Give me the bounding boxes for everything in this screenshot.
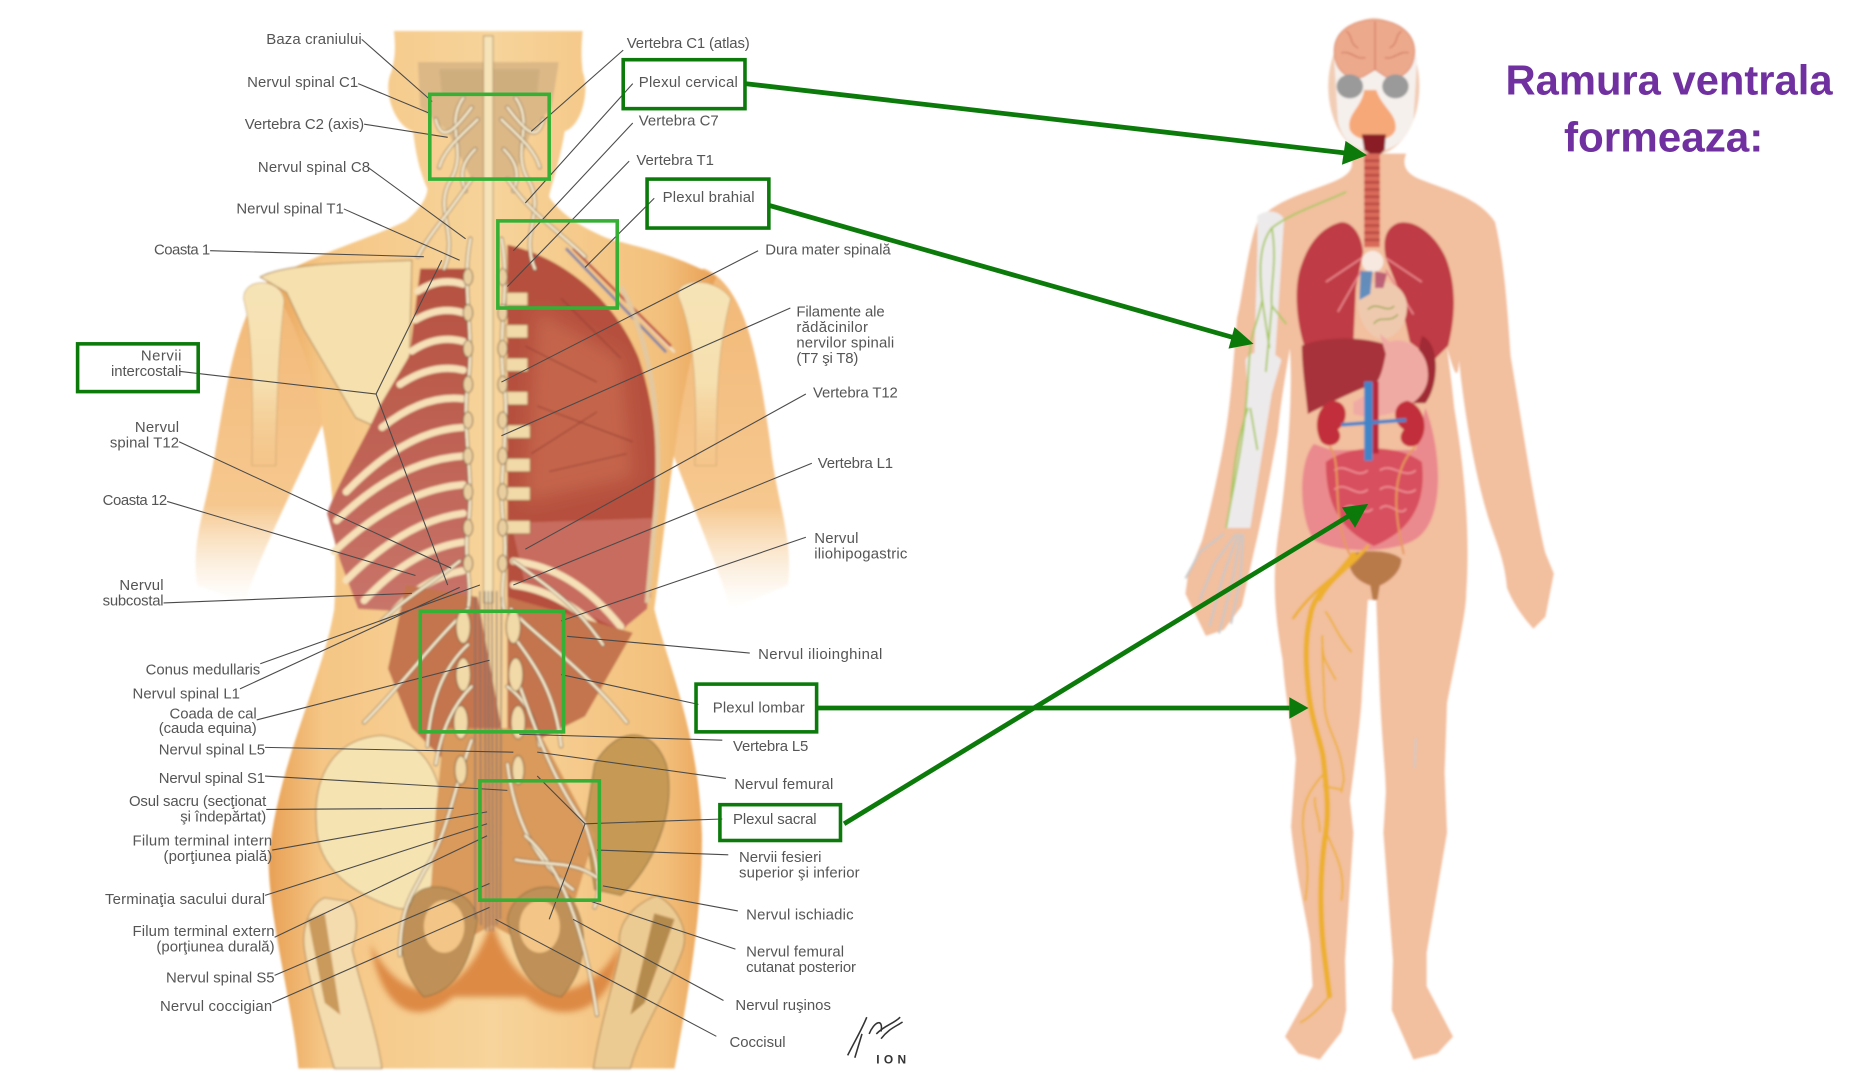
label: Dura mater spinală	[501, 241, 891, 382]
label: Nervul spinal S5: Nervul spinal S5	[166, 970, 275, 987]
right lung	[1384, 222, 1454, 360]
right femur	[593, 895, 684, 1069]
trachea	[1364, 154, 1380, 247]
label: Nervul ruşinos: Nervul ruşinos	[735, 997, 831, 1014]
label: Plexul lombar	[561, 675, 805, 717]
right ilium	[585, 735, 669, 895]
highlight: cervical region	[430, 94, 549, 179]
liver	[1302, 338, 1392, 414]
left ribs	[334, 282, 463, 611]
label: Vertebra L1: Vertebra L1	[818, 455, 893, 472]
label: Nervul iliohipogastric: iliohipogastric	[814, 546, 908, 563]
label: Coasta 1: Coasta 1	[154, 241, 210, 258]
title: formeaza:	[1564, 114, 1763, 161]
label: Nervul ruşinos	[573, 919, 831, 1014]
label: Nervul iliohipogastric	[561, 530, 908, 621]
label: Dura mater spinală: Dura mater spinală	[765, 241, 891, 258]
label: Nervul spinal L5	[159, 742, 513, 759]
sacrum area	[430, 728, 595, 943]
box: Plexul sacral	[720, 805, 840, 840]
box: Plexul cervical	[623, 60, 745, 109]
label: Osul sacru: Osul sacru (secţionat	[129, 793, 267, 810]
bronchi	[1362, 251, 1383, 272]
hand bones	[1185, 534, 1243, 634]
label: Vertebra C1	[531, 35, 750, 131]
lung vein texture	[525, 298, 633, 472]
back torso skin	[269, 31, 716, 1069]
label: Nervul spinal T1	[236, 201, 460, 260]
sciatic nerve main trunk	[1306, 554, 1353, 996]
skull	[1334, 37, 1417, 151]
highlight: brachial region	[498, 221, 617, 308]
label: Conus medullaris: Conus medullaris	[146, 662, 260, 679]
stomach	[1353, 334, 1428, 416]
brachial vessels	[566, 245, 675, 352]
arrow: Plexul cervical to neck	[745, 84, 1367, 165]
neck bones	[439, 69, 540, 93]
label: Vertebra C2	[245, 116, 448, 137]
label: Coada de cal: (cauda equina)	[159, 720, 257, 737]
title	[1505, 56, 1833, 161]
right arm	[651, 269, 789, 609]
box: Plexul brahial	[647, 179, 769, 228]
left femur	[304, 898, 382, 1069]
label: Nervul spinal L1: Nervul spinal L1	[133, 685, 240, 702]
label: Nervii intercostali	[111, 260, 448, 585]
label: Nervii intercostali: intercostali	[111, 363, 181, 380]
signature mark: ION	[876, 1053, 906, 1067]
highlight: sacral region	[480, 781, 599, 900]
label: Nervul coccigian	[160, 907, 489, 1015]
label: Filum terminal intern: (porţiunea pială)	[164, 848, 272, 865]
box: Nervii intercostali	[78, 344, 198, 392]
cauda equina	[475, 591, 501, 931]
panel: human body with organs and nerves	[1185, 18, 1554, 1059]
label: Nervul spinal S5	[166, 883, 489, 987]
label: Baza craniului	[266, 31, 432, 101]
right eye socket	[1382, 74, 1409, 98]
label: Vertebra T12: Vertebra T12	[813, 385, 898, 402]
label: Coada de cal	[159, 660, 489, 737]
label: Nervul femural cutanat posterior: Nervul femural	[746, 943, 844, 960]
renal vessels and aorta	[1341, 382, 1406, 461]
left scapula	[260, 260, 412, 429]
label: Nervul femural cutanat posterior: cutanat posterior	[746, 959, 856, 976]
label: Nervul spinal C8: Nervul spinal C8	[258, 159, 370, 176]
small intestine and colon	[1302, 408, 1438, 550]
knee highlight	[1415, 738, 1416, 768]
panel: posterior spinal anatomy illustration	[196, 31, 789, 1069]
label: Nervul spinal T12: Nervul	[135, 419, 179, 436]
label: Filamente ale rădăcinilor: (T7 şi T8)	[796, 350, 858, 367]
label: Coccisul: Coccisul	[729, 1034, 786, 1051]
right humerus	[678, 282, 731, 466]
spinal nerve plexus	[364, 98, 627, 1015]
label: Nervul spinal T1: Nervul spinal T1	[236, 201, 344, 218]
label: Nervul coccigian: Nervul coccigian	[160, 998, 272, 1015]
label: Filum terminal intern	[133, 812, 487, 865]
label: Filum terminal extern	[133, 836, 487, 956]
nasal cavity	[1349, 90, 1396, 140]
label: Plexul brahial: Plexul brahial	[663, 189, 755, 206]
box: Plexul lombar	[696, 684, 817, 732]
diaphragm muscle	[511, 518, 652, 630]
right flank band	[621, 287, 658, 603]
lung branching	[1326, 258, 1422, 314]
right lumbar muscle area	[507, 597, 633, 740]
label: Nervul femural	[537, 752, 833, 793]
label: Coasta 1	[154, 241, 424, 258]
leader lines and labels: right side	[495, 35, 908, 1051]
label: Vertebra C1: Vertebra C1 (atlas)	[627, 35, 750, 52]
ureters	[1329, 446, 1416, 554]
title: Ramura ventrala	[1505, 56, 1833, 103]
obturator foramen right	[519, 900, 560, 953]
lumbar muscle area	[388, 585, 501, 776]
signature mark	[848, 1017, 906, 1067]
label: Nervul spinal C1	[247, 74, 430, 113]
label: Plexul sacral: Plexul sacral	[733, 811, 817, 828]
label: Nervii fesieri	[597, 849, 860, 882]
label: Filum terminal extern: (porţiunea durală)	[156, 939, 275, 956]
label: Nervul spinal L5: Nervul spinal L5	[159, 742, 265, 759]
label: Vertebra C7	[513, 112, 719, 251]
label: Filum terminal extern: Filum terminal extern	[133, 923, 275, 940]
label: Coasta 12	[103, 492, 415, 575]
label: Nervul femural: Nervul femural	[734, 776, 833, 793]
label: Filamente ale rădăcinilor: nervilor spinali	[796, 334, 894, 351]
label: Nervul ischiadic: Nervul ischiadic	[746, 906, 854, 923]
neck and skull detail	[418, 62, 559, 179]
label: Nervul spinal C8	[258, 159, 466, 239]
lung mottling	[525, 310, 633, 501]
label: Vertebra L1	[513, 455, 893, 585]
label: Vertebra C2: Vertebra C2 (axis)	[245, 116, 364, 133]
label: Plexul sacral	[537, 776, 817, 919]
label: Nervul spinal S1: Nervul spinal S1	[159, 770, 265, 787]
label: Nervii intercostali: Nervii	[141, 348, 181, 365]
label: Osul sacru: şi îndepărtat)	[180, 808, 266, 825]
label: Nervul femural cutanat posterior	[591, 901, 856, 976]
label: Osul sacru	[129, 793, 454, 825]
label: Nervul spinal L1	[133, 587, 460, 702]
label: Filamente ale rădăcinilor: Filamente ale	[796, 303, 885, 320]
label: Nervul spinal S1	[159, 770, 507, 790]
label: Nervii fesieri: Nervii fesieri	[739, 849, 821, 866]
label: Nervul ilioinghinal	[567, 636, 882, 663]
leg nerve branches	[1293, 546, 1368, 1022]
label: Plexul brahial	[585, 189, 755, 267]
leader lines and labels: left side	[103, 31, 513, 1015]
label: Nervul spinal C1: Nervul spinal C1	[247, 74, 358, 91]
left ilium	[316, 735, 444, 909]
label: Terminaţia sacului dural	[105, 824, 487, 908]
label: Coasta 12: Coasta 12	[103, 492, 167, 509]
label: Conus medullaris	[146, 585, 480, 679]
left eye socket	[1337, 74, 1363, 98]
label: Nervul subcostal: Nervul	[119, 577, 164, 594]
spinal cord	[484, 36, 493, 603]
left lung	[1297, 222, 1363, 355]
bladder	[1349, 551, 1401, 600]
arrow: Plexul brahial to arm	[769, 205, 1254, 349]
label: Plexul cervical	[525, 74, 738, 203]
arrow: Plexul lombar to leg	[818, 697, 1308, 719]
right lung and muscle	[507, 245, 656, 633]
arrow: Plexul sacral to abdomen	[844, 504, 1368, 824]
label: Nervul ilioinghinal: Nervul ilioinghinal	[758, 646, 882, 663]
left rib cage	[327, 269, 468, 615]
right kidney	[1395, 401, 1425, 446]
label: Vertebra T12	[525, 385, 898, 549]
obturator foramen left	[424, 900, 464, 953]
thoracic ganglia beads	[463, 269, 507, 572]
label: Vertebra L5: Vertebra L5	[733, 738, 808, 755]
label: Baza craniului: Baza craniului	[266, 31, 362, 48]
label: Nervul spinal T12: spinal T12	[110, 435, 179, 452]
right lower rib bands	[513, 561, 621, 633]
buttocks shading	[370, 919, 621, 1012]
label: Nervul ischiadic	[603, 886, 854, 923]
label: Plexul cervical: Plexul cervical	[639, 74, 738, 91]
highlight: lumbar region	[420, 611, 564, 732]
larynx	[1362, 134, 1386, 158]
label: Filamente ale rădăcinilor: rădăcinilor	[796, 319, 868, 336]
pelvic floor bones	[401, 887, 478, 997]
left kidney	[1317, 401, 1346, 445]
left arm	[196, 277, 328, 603]
label: Coccisul	[495, 919, 786, 1051]
lumbar vertebrae	[454, 610, 525, 784]
left humerus	[244, 283, 284, 466]
arm bones	[1226, 211, 1284, 528]
right trochanter shading	[630, 913, 675, 1015]
heart	[1358, 271, 1407, 339]
right thoracic vertebral processes	[506, 293, 530, 534]
brain	[1334, 20, 1415, 78]
left trochanter shading	[308, 913, 340, 1015]
label: Nervul iliohipogastric: Nervul	[814, 530, 858, 547]
label: Nervul spinal T12	[110, 419, 451, 568]
label: Filamente ale rădăcinilor	[501, 303, 894, 436]
label: Vertebra L5	[519, 734, 808, 755]
spleen	[1406, 336, 1436, 403]
label: Vertebra T1	[507, 152, 714, 287]
arm nerves	[1226, 192, 1346, 528]
label: Filum terminal intern: Filum terminal intern	[133, 832, 272, 849]
body silhouette	[1185, 154, 1554, 1059]
label: Nervii fesieri: superior şi inferior	[739, 865, 860, 882]
label: Nervul subcostal: subcostal	[103, 592, 164, 609]
label: Terminaţia sacului dural: Terminaţia sacului dural	[105, 891, 265, 908]
label: Coada de cal: Coada de cal	[170, 706, 257, 723]
label: Nervul subcostal	[103, 577, 412, 609]
label: Vertebra C7: Vertebra C7	[639, 112, 719, 129]
label: Vertebra T1: Vertebra T1	[636, 152, 714, 169]
head	[1328, 18, 1419, 155]
label: Plexul lombar: Plexul lombar	[713, 700, 805, 717]
